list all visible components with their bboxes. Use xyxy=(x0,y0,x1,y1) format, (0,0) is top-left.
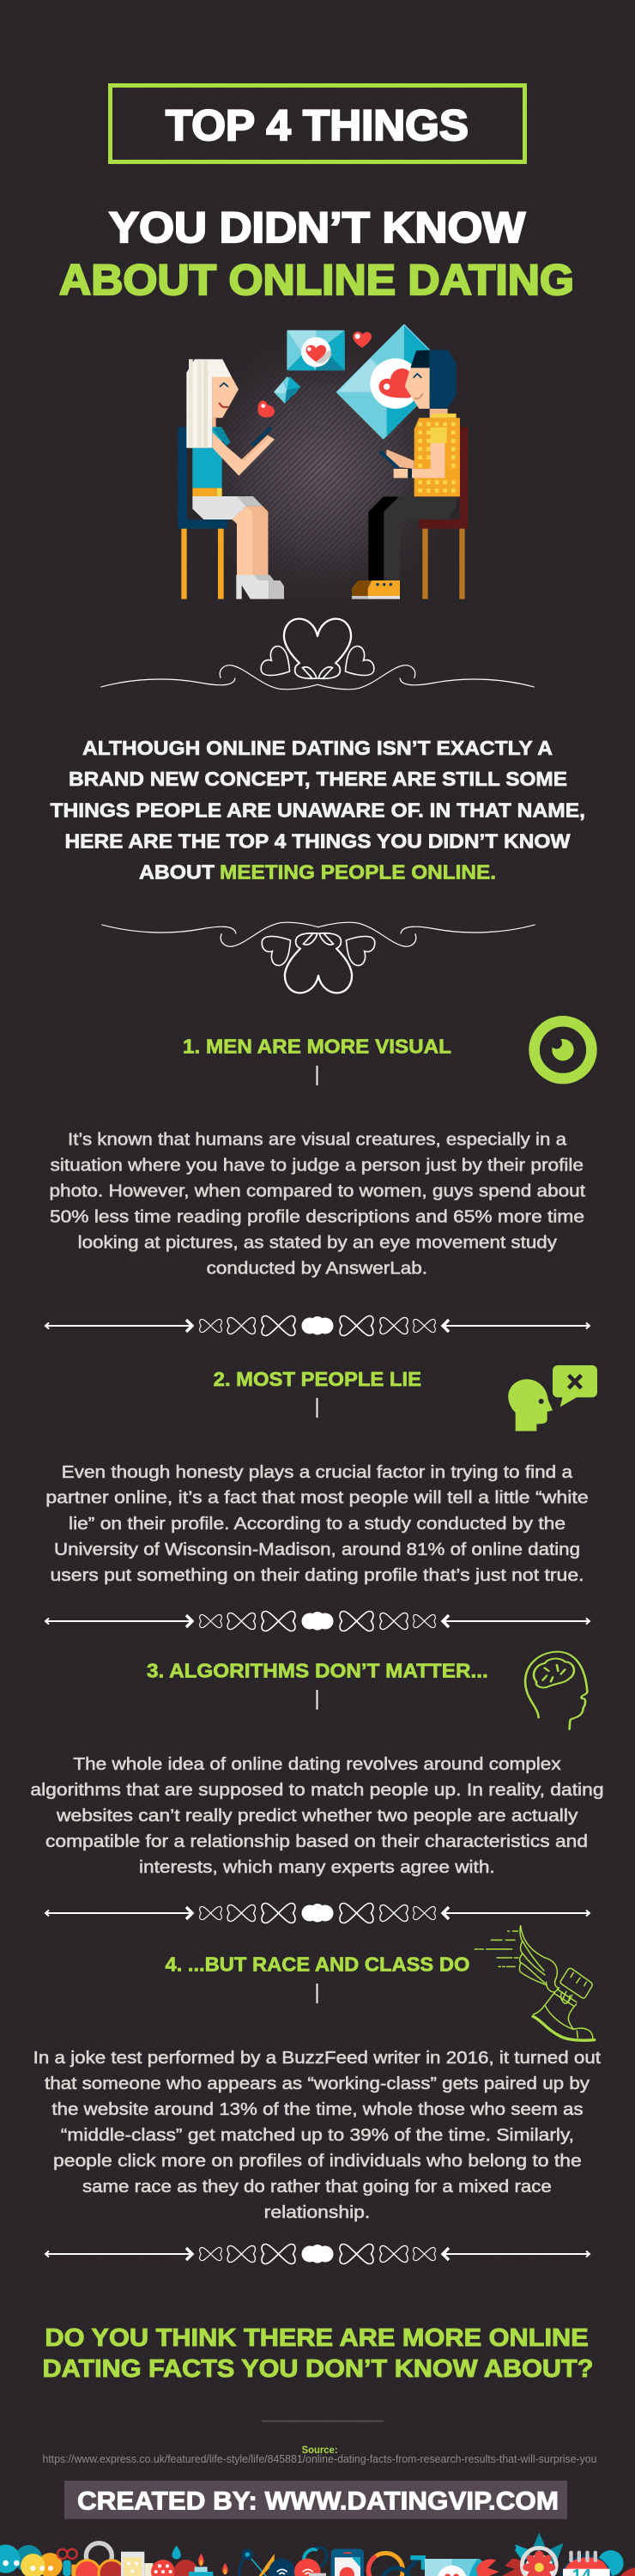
body text 4: people click more on profiles of individuals who belong to the xyxy=(53,2152,582,2171)
intro text: THINGS PEOPLE ARE UNAWARE OF. IN THAT NAME, xyxy=(50,799,585,821)
body text 2: University of Wisconsin-Madison, around 81% of online dating xyxy=(54,1540,580,1559)
icon: small envelope xyxy=(287,331,345,370)
closing question: DO YOU THINK THERE ARE MORE ONLINE xyxy=(45,2324,589,2352)
icon strip: bottom right xyxy=(309,2532,635,2576)
icon: large diamond envelope xyxy=(337,325,450,438)
flourish: top hearts xyxy=(101,619,534,690)
source rule xyxy=(262,2421,384,2422)
icon: winged boot xyxy=(475,1926,595,2040)
body text 2: partner online, it’s a fact that most people will tell a little “white xyxy=(45,1489,589,1508)
icon: lying head with speech bubble xyxy=(508,1365,597,1431)
title: ABOUT ONLINE DATING xyxy=(59,256,574,304)
body text 1 xyxy=(50,1131,586,1279)
created by banner: CREATED BY: WWW.DATINGVIP.COM xyxy=(77,2488,559,2516)
body text 2: users put something on their dating profile that’s just not true. xyxy=(50,1566,584,1585)
body text 4: same race as they do rather that going for a mixed race xyxy=(82,2178,552,2196)
intro text: HERE ARE THE TOP 4 THINGS YOU DIDN’T KNOW xyxy=(65,829,571,852)
body text 1: photo. However, when compared to women, guys spend about xyxy=(50,1182,586,1201)
panel: fact 2 xyxy=(45,1365,597,1585)
body text 3: interests, which many experts agree with. xyxy=(139,1858,495,1877)
body text 4: In a joke test performed by a BuzzFeed writer in 2016, it turned out xyxy=(33,2049,601,2068)
divider 2 xyxy=(45,1611,590,1631)
source: Source: xyxy=(302,2444,338,2456)
heading 4: 4. ...BUT RACE AND CLASS DO xyxy=(165,1953,469,1976)
title box: TOP 4 THINGS xyxy=(166,101,469,149)
body text 1: looking at pictures, as stated by an eye movement study xyxy=(78,1234,557,1253)
title xyxy=(59,204,574,304)
heading 1: 1. MEN ARE MORE VISUAL xyxy=(183,1035,451,1057)
intro text: BRAND NEW CONCEPT, THERE ARE STILL SOME xyxy=(69,768,567,790)
body text 4: that someone who appears as “working-class” gets paired up by xyxy=(45,2075,590,2093)
heading 2: 2. MOST PEOPLE LIE xyxy=(214,1368,421,1390)
body text 4: relationship. xyxy=(264,2203,370,2222)
panel: fact 3 xyxy=(30,1652,604,1877)
intro text: ALTHOUGH ONLINE DATING ISN’T EXACTLY A xyxy=(82,737,553,759)
icon: head with brain xyxy=(525,1652,587,1729)
title box xyxy=(110,86,525,161)
panel: fact 1 xyxy=(50,1021,591,1279)
body text 1: It’s known that humans are visual creatures, especially in a xyxy=(68,1131,567,1150)
panel: fact 4 xyxy=(33,1926,601,2222)
icon: top heart xyxy=(353,331,372,348)
icon strip: bottom left xyxy=(0,2543,321,2576)
body text 1: conducted by AnswerLab. xyxy=(207,1260,427,1279)
closing question xyxy=(43,2324,593,2383)
flourish: bottom hearts xyxy=(102,922,535,993)
body text 3: websites can’t really predict whether two people are actually xyxy=(56,1807,578,1826)
divider 3 xyxy=(45,1903,590,1923)
source: https://www.express.co.uk/featured/life-style/life/845881/online-dating-facts-from-research-results-that-will-surprise-you xyxy=(43,2452,597,2465)
body text 4 xyxy=(33,2049,601,2222)
divider 1 xyxy=(45,1315,590,1336)
body text 3: The whole idea of online dating revolves around complex xyxy=(73,1755,561,1774)
illustration: couple dating online xyxy=(169,315,478,624)
body text 4: “middle-class” get matched up to 39% of the time. Similarly, xyxy=(61,2126,574,2145)
connector line 3 xyxy=(316,1690,318,1710)
title: YOU DIDN’T KNOW xyxy=(109,204,526,252)
intro text: ABOUT xyxy=(139,861,215,884)
body text 3: compatible for a relationship based on their characteristics and xyxy=(45,1832,588,1851)
icon: woman's heart xyxy=(257,400,275,417)
man figure xyxy=(352,350,469,599)
body text 3: algorithms that are supposed to match people up. In reality, dating xyxy=(30,1781,604,1800)
body text 1: 50% less time reading profile descriptions and 65% more time xyxy=(50,1207,584,1226)
divider 4 xyxy=(45,2245,590,2263)
intro text xyxy=(50,737,585,884)
woman figure xyxy=(178,359,284,599)
connector line 1 xyxy=(316,1066,318,1085)
body text 2 xyxy=(45,1463,589,1585)
intro text: MEETING PEOPLE ONLINE. xyxy=(220,861,496,884)
body text 2: Even though honesty plays a crucial factor in trying to find a xyxy=(62,1463,573,1482)
source xyxy=(43,2444,597,2465)
body text 2: lie” on their profile. According to a study conducted by the xyxy=(69,1515,565,1534)
heading 3: 3. ALGORITHMS DON’T MATTER... xyxy=(147,1660,488,1682)
connector line 2 xyxy=(316,1398,318,1418)
closing question: DATING FACTS YOU DON’T KNOW ABOUT? xyxy=(43,2355,593,2383)
created by banner xyxy=(64,2481,567,2519)
body text 4: the website around 13% of the time, whole those who seem as xyxy=(51,2100,584,2119)
body text 3 xyxy=(30,1755,604,1877)
connector line 4 xyxy=(316,1984,318,2003)
icon: eye xyxy=(535,1021,591,1078)
icon: tiny diamond envelope xyxy=(274,376,300,404)
body text 1: situation where you have to judge a person just by their profile xyxy=(50,1156,584,1175)
